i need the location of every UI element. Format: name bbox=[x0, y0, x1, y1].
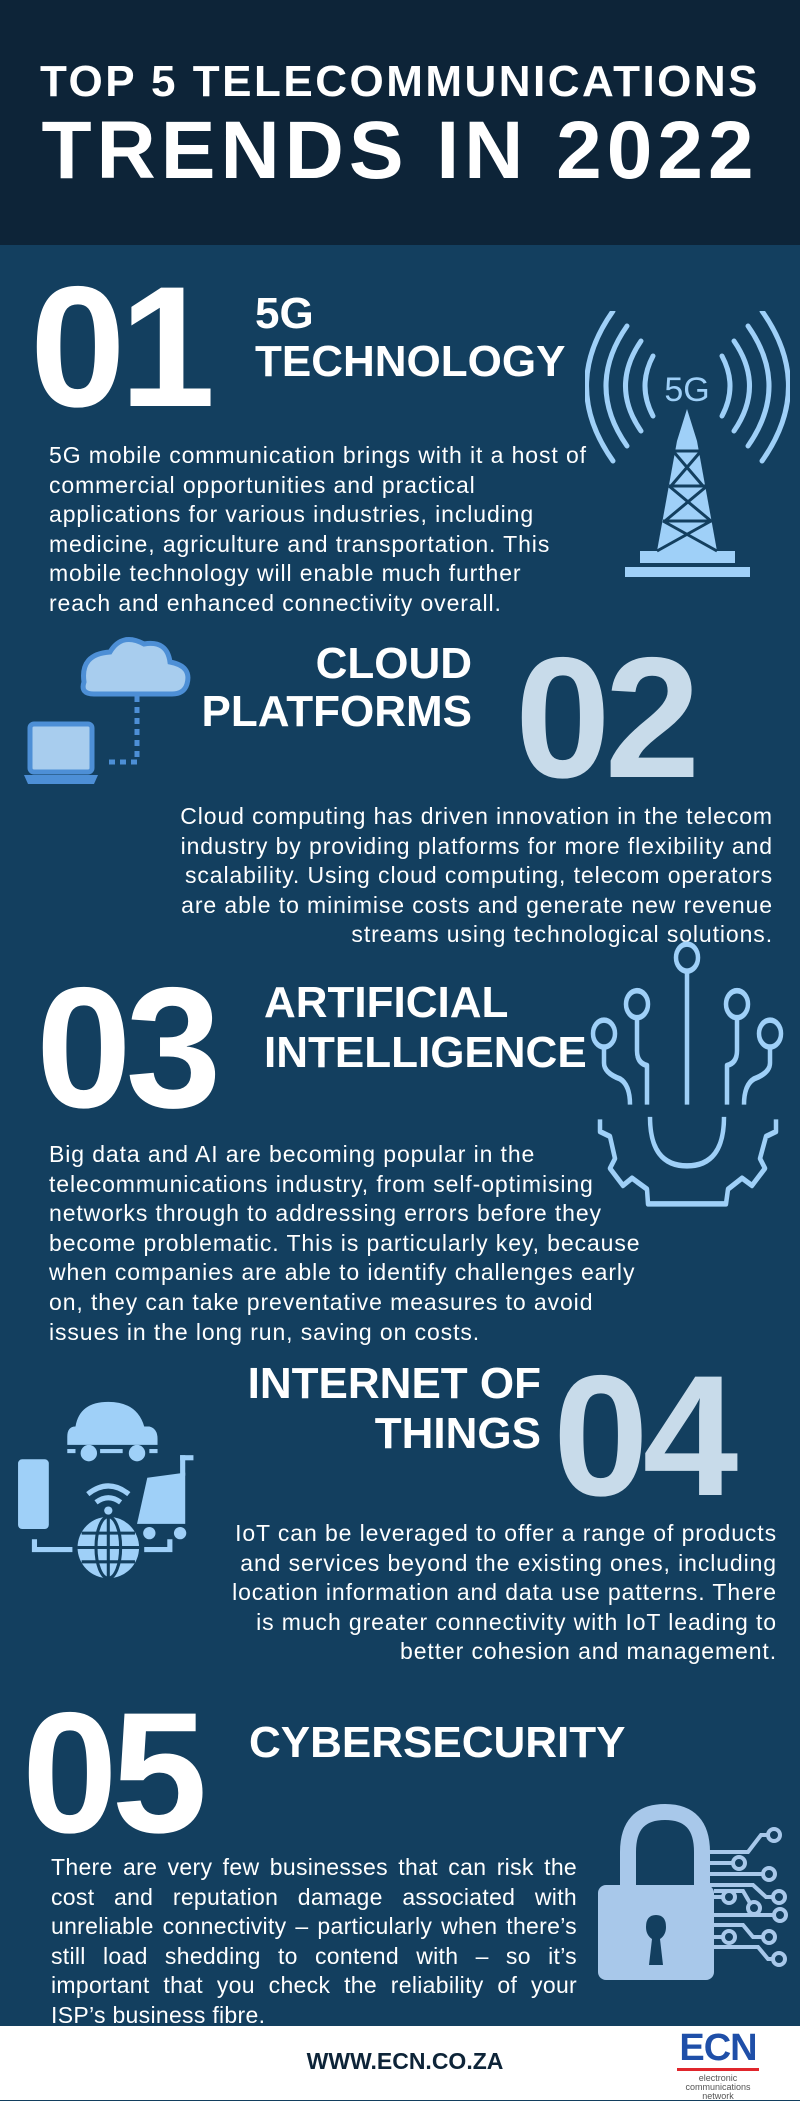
paragraph 2: are able to minimise costs and generate new revenue bbox=[181, 892, 773, 918]
header band bbox=[0, 0, 800, 245]
paragraph 3: when companies are able to identify challenges early bbox=[49, 1259, 635, 1285]
icon: AI chip gear bbox=[590, 941, 784, 1207]
section 3: AI bbox=[36, 941, 784, 1345]
heading cloud platforms: PLATFORMS bbox=[202, 687, 472, 736]
footer bbox=[0, 2026, 800, 2100]
heading AI: ARTIFICIAL bbox=[264, 978, 508, 1027]
section 1: 5G bbox=[30, 251, 790, 616]
heading cybersecurity: CYBERSECURITY bbox=[249, 1718, 626, 1767]
paragraph 2 bbox=[180, 803, 773, 947]
paragraph 1: medicine, agriculture and transportation. This bbox=[49, 531, 550, 557]
paragraph 2: Cloud computing has driven innovation in the telecom bbox=[180, 803, 773, 829]
paragraph 3: networks through to addressing errors before they bbox=[49, 1200, 602, 1226]
logo: ECN: network bbox=[702, 2091, 734, 2101]
paragraph 4: better cohesion and management. bbox=[400, 1638, 777, 1664]
paragraph 3: Big data and AI are becoming popular in the bbox=[49, 1141, 535, 1167]
logo: ECN: ECN bbox=[679, 2027, 757, 2069]
paragraph 1: reach and enhanced connectivity overall. bbox=[49, 590, 502, 616]
number 04: 04 bbox=[553, 1340, 732, 1532]
paragraph 3: on, they can take preventative measures to avoid bbox=[49, 1289, 593, 1315]
paragraph 2: industry by providing platforms for more flexibility and bbox=[181, 833, 773, 859]
heading IoT bbox=[248, 1359, 541, 1458]
paragraph 3: issues in the long run, saving on costs. bbox=[49, 1319, 480, 1345]
icon: cloud and laptop bbox=[24, 637, 190, 784]
number 05: 05 bbox=[22, 1677, 201, 1869]
heading AI: INTELLIGENCE bbox=[264, 1028, 587, 1077]
heading IoT: THINGS bbox=[375, 1409, 541, 1458]
section 4: IoT bbox=[18, 1340, 777, 1664]
logo: ECN: electronic bbox=[699, 2073, 737, 2083]
paragraph 5: still load shedding to contend with – so it’s bbox=[51, 1943, 577, 1969]
paragraph 1: 5G mobile communication brings with it a host of bbox=[49, 442, 587, 468]
title line 2: TRENDS IN 2022 bbox=[41, 105, 759, 196]
paragraph 5: unreliable connectivity – particularly when there’s bbox=[51, 1913, 577, 1939]
section 2: cloud bbox=[24, 622, 773, 947]
paragraph 1: mobile technology will enable much further bbox=[49, 560, 521, 586]
paragraph 1: applications for various industries, including bbox=[49, 501, 534, 527]
paragraph 5: cost and reputation damage associated with bbox=[51, 1884, 577, 1910]
paragraph 1 bbox=[49, 442, 587, 616]
heading 5G technology bbox=[255, 289, 565, 386]
heading cloud platforms: CLOUD bbox=[316, 639, 472, 688]
paragraph 3 bbox=[49, 1141, 640, 1345]
paragraph 4: and services beyond the existing ones, including bbox=[240, 1550, 777, 1576]
number 03: 03 bbox=[36, 952, 215, 1144]
paragraph 5: There are very few businesses that can risk the bbox=[51, 1854, 577, 1880]
paragraph 2: streams using technological solutions. bbox=[351, 921, 773, 947]
paragraph 4 bbox=[232, 1520, 777, 1664]
paragraph 5 bbox=[51, 1854, 577, 2028]
title line 1: TOP 5 TELECOMMUNICATIONS bbox=[40, 57, 760, 106]
paragraph 2: scalability. Using cloud computing, telecom operators bbox=[185, 862, 773, 888]
paragraph 5: important that you check the reliability of your bbox=[51, 1972, 577, 1998]
section 5: cybersecurity bbox=[22, 1677, 788, 2028]
icon: IoT devices bbox=[18, 1402, 194, 1578]
paragraph 4: IoT can be leveraged to offer a range of products bbox=[235, 1520, 777, 1546]
icon: 5G tower: 5G bbox=[664, 371, 710, 409]
heading cloud platforms bbox=[202, 639, 472, 736]
heading 5G technology: 5G bbox=[255, 289, 314, 338]
number 01: 01 bbox=[30, 251, 209, 443]
paragraph 4: location information and data use patterns. There bbox=[232, 1579, 777, 1605]
logo: ECN bbox=[677, 2027, 759, 2101]
heading 5G technology: TECHNOLOGY bbox=[255, 337, 565, 386]
icon: padlock circuit bbox=[598, 1804, 788, 1980]
website url: WWW.ECN.CO.ZA bbox=[307, 2048, 503, 2074]
icon: 5G tower bbox=[585, 311, 790, 577]
logo: ECN: communications bbox=[685, 2082, 751, 2092]
heading IoT: INTERNET OF bbox=[248, 1359, 541, 1408]
paragraph 4: is much greater connectivity with IoT leading to bbox=[256, 1609, 777, 1635]
heading AI bbox=[264, 978, 587, 1077]
paragraph 3: become problematic. This is particularly key, because bbox=[49, 1230, 640, 1256]
paragraph 1: commercial opportunities and practical bbox=[49, 472, 476, 498]
paragraph 3: telecommunications industry, from self-optimising bbox=[49, 1171, 594, 1197]
number 02: 02 bbox=[515, 622, 694, 814]
paragraph 5: ISP’s business fibre. bbox=[51, 2002, 265, 2028]
